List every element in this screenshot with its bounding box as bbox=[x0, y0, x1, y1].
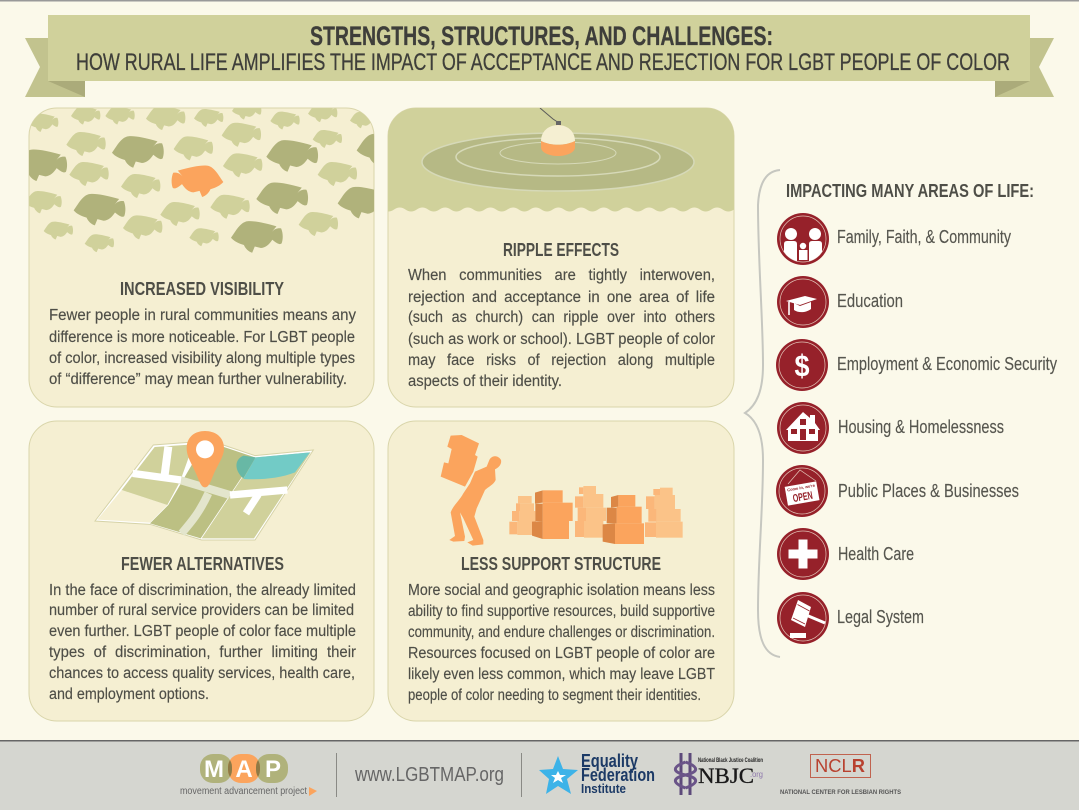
text block: increased visibility: of color, increased visibility along multiple types bbox=[49, 350, 355, 367]
icon: dollar sign bbox=[776, 339, 828, 391]
title banner: STRENGTHS, STRUCTURES, AND CHALLENGES: bbox=[310, 21, 773, 51]
list item: public places and businesses bbox=[776, 465, 1019, 517]
illustration: person carrying boxes and box stacks bbox=[441, 435, 683, 546]
icon: open sign bbox=[776, 465, 828, 517]
logo: MAP: A bbox=[235, 756, 253, 783]
text block: ripple effects: When communities are tightly interwoven, bbox=[408, 267, 715, 284]
logo: NCLR: NATIONAL CENTER FOR LESBIAN RIGHTS bbox=[780, 790, 901, 796]
logo: Equality Federation Institute: Institute bbox=[581, 781, 626, 796]
text block: less support structure: likely even less common, which may leave LGBT bbox=[408, 666, 715, 683]
logo: MAP: M bbox=[204, 756, 224, 783]
list item: employment and economic security bbox=[776, 339, 1057, 391]
list item: housing and homelessness bbox=[777, 402, 1004, 454]
logo: NCLR bbox=[780, 754, 901, 796]
logo: Equality Federation Institute: Equality bbox=[581, 751, 638, 771]
text block: fewer alternatives: even further. LGBT people of color face multiple bbox=[49, 623, 356, 640]
label: Public Places & Businesses bbox=[838, 481, 1019, 501]
text block: less support structure: community, and endure challenges or discrimination. bbox=[408, 624, 715, 641]
logo: MAP: P bbox=[265, 756, 281, 783]
footer bbox=[0, 740, 1079, 810]
label: Family, Faith, & Community bbox=[837, 227, 1011, 247]
icon: dollar sign: $ bbox=[795, 348, 809, 383]
heading: fewer alternatives: FEWER ALTERNATIVES bbox=[121, 554, 284, 574]
logo: NBJC: .org bbox=[750, 770, 763, 779]
logo: Equality Federation Institute bbox=[539, 751, 655, 796]
icon: house bbox=[777, 402, 829, 454]
text block: fewer alternatives: chances to access quality services, health care, bbox=[49, 665, 355, 682]
illustration: map with pin bbox=[95, 431, 313, 540]
text block: ripple effects: aspects of their identity. bbox=[408, 373, 562, 390]
text block: fewer alternatives: number of rural service providers can be limited bbox=[49, 602, 354, 619]
logo: MAP: movement advancement project bbox=[180, 786, 307, 797]
text block: increased visibility bbox=[49, 307, 356, 388]
logo: MAP bbox=[180, 754, 317, 797]
text block: increased visibility: of “difference” may mean further vulnerability. bbox=[49, 371, 347, 388]
list item: education bbox=[777, 276, 903, 328]
text block: ripple effects: may face risks of rejection along multiple bbox=[408, 352, 715, 369]
text block: less support structure: Resources focused on LGBT people of color are bbox=[408, 645, 715, 662]
text block: ripple effects: (such as work or school). LGBT people of color bbox=[408, 331, 715, 348]
panel: ripple effects bbox=[383, 108, 734, 407]
panel: increased visibility bbox=[28, 108, 374, 408]
icon: gavel bbox=[777, 592, 829, 644]
text block: increased visibility: Fewer people in rural communities means any bbox=[49, 307, 356, 324]
text block: fewer alternatives: and employment options. bbox=[49, 686, 209, 703]
icon: cross bbox=[777, 528, 829, 580]
text block: less support structure bbox=[408, 582, 715, 704]
panel: less support structure bbox=[388, 421, 734, 721]
text block: increased visibility: difference is more noticeable. For LGBT people bbox=[49, 329, 355, 346]
text block: less support structure: More social and geographic isolation means less bbox=[408, 582, 715, 599]
title banner bbox=[25, 15, 1054, 97]
illustration: bobber and ripples bbox=[383, 108, 734, 212]
label: Health Care bbox=[838, 544, 914, 564]
list item: legal system bbox=[777, 592, 924, 644]
text block: ripple effects: (such as church) can ripple over into others bbox=[408, 309, 715, 326]
logo: NCLR: NCLR bbox=[815, 756, 865, 776]
brace bbox=[745, 170, 780, 657]
icon: graduation cap bbox=[777, 276, 829, 328]
text block: less support structure: people of color needing to segment their identities. bbox=[408, 687, 701, 704]
text block: fewer alternatives bbox=[49, 582, 356, 703]
text block: less support structure: ability to find supportive resources, build supportive bbox=[408, 603, 715, 620]
website url: www.LGBTMAP.org bbox=[354, 764, 504, 786]
logo: NBJC: NBJC bbox=[698, 763, 754, 788]
panel: fewer alternatives bbox=[29, 421, 374, 721]
label: Legal System bbox=[837, 607, 924, 627]
list item: family, faith and community bbox=[777, 213, 1011, 265]
icon: family bbox=[777, 213, 829, 265]
text block: fewer alternatives: In the face of discrimination, the already limited bbox=[49, 582, 356, 599]
illustration: school of fish bbox=[15, 102, 408, 253]
heading: less support structure: LESS SUPPORT STRUCTURE bbox=[461, 554, 661, 574]
label: Housing & Homelessness bbox=[838, 417, 1004, 437]
text block: fewer alternatives: types of discrimination, further limiting their bbox=[49, 644, 356, 661]
logo: NBJC bbox=[675, 753, 763, 795]
text block: ripple effects bbox=[408, 267, 715, 390]
heading: increased visibility: INCREASED VISIBILITY bbox=[120, 279, 284, 299]
label: Education bbox=[837, 291, 903, 311]
icon: open sign: Come in, we're bbox=[787, 483, 816, 492]
icon: open sign: OPEN bbox=[792, 490, 814, 505]
text block: ripple effects: rejection and acceptance in one area of life bbox=[408, 289, 715, 306]
heading: ripple effects: RIPPLE EFFECTS bbox=[503, 240, 619, 260]
list item: health care bbox=[777, 528, 914, 580]
logo: NBJC: National Black Justice Coalition bbox=[698, 758, 763, 764]
logo: Equality Federation Institute: Federation bbox=[581, 765, 655, 785]
